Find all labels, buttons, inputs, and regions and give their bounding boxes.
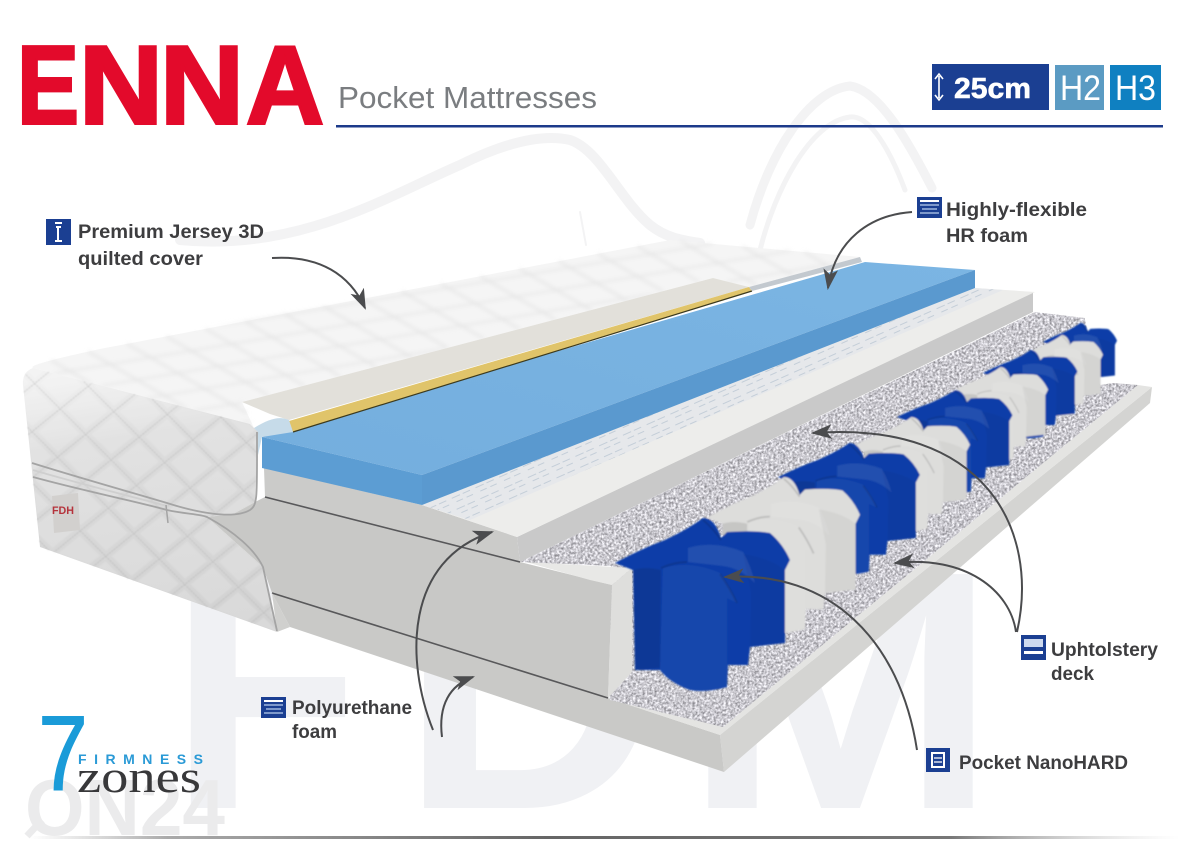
logo: 7 firmness zones: FIRMNESS xyxy=(78,751,203,767)
logo: 7 firmness zones: zones xyxy=(77,751,201,802)
logo: 7 firmness zones: 7 xyxy=(38,693,88,813)
blue HR foam layer xyxy=(262,262,975,505)
badge: height 25cm: 25cm xyxy=(954,73,1031,105)
badge: H2 firmness: H2 xyxy=(1060,69,1101,108)
title: ENNA: A xyxy=(246,24,324,148)
cover end panel xyxy=(23,368,290,632)
pocket group 2 white xyxy=(707,477,860,633)
FDH sewn label: FDH xyxy=(52,505,74,517)
icon: jersey cover xyxy=(46,219,71,245)
label: premium cover: quilted cover xyxy=(78,249,204,270)
fleece upholstery under pockets xyxy=(610,320,1138,727)
icon: HR foam xyxy=(917,197,942,218)
label: premium cover: Premium Jersey 3D xyxy=(78,222,264,243)
arrow: upholstery lower xyxy=(895,562,1016,632)
upper fleece deck xyxy=(520,312,1085,566)
zipper seams xyxy=(32,432,277,631)
cover top surface xyxy=(33,240,860,428)
badge: height 25cm xyxy=(932,64,1049,110)
watermark: swoosh lines xyxy=(180,86,932,250)
arrow: pocket xyxy=(725,577,917,750)
icon: polyurethane xyxy=(261,697,286,718)
watermark: ON24: ON24 xyxy=(25,763,225,852)
pocket group 5 blue xyxy=(897,390,1012,494)
label: premium cover xyxy=(78,222,264,270)
pocket group 3 blue xyxy=(778,443,920,574)
label: HR foam xyxy=(946,200,1087,247)
title: ENNA: N xyxy=(160,24,244,148)
arrow: polyurethane lower xyxy=(441,677,473,737)
footer rule xyxy=(30,836,1180,839)
pocket group 8 white xyxy=(1020,335,1103,416)
arrow: polyurethane top xyxy=(416,532,492,730)
label: polyurethane: foam xyxy=(292,722,337,743)
pocket springs row xyxy=(615,323,1117,691)
label: upholstery: Uphtolstery xyxy=(1051,640,1158,661)
pocket group 9 blue xyxy=(1043,323,1117,396)
label: HR foam: HR foam xyxy=(946,226,1028,247)
watermark: FDM letters xyxy=(170,483,998,859)
FDH sewn label xyxy=(52,493,80,533)
icon: pocket spring xyxy=(926,748,950,772)
header rule xyxy=(336,125,1163,128)
base foam slab xyxy=(272,385,1152,772)
pocket group 7 blue xyxy=(983,350,1078,438)
arrow: upholstery upper xyxy=(813,432,1022,632)
logo: 7 firmness zones xyxy=(38,693,203,813)
wool and gold inner layers xyxy=(242,257,862,455)
subtitle: Pocket Mattresses: Pocket Mattresses xyxy=(338,80,597,115)
label: HR foam: Highly-flexible xyxy=(946,200,1087,221)
title: ENNA: E xyxy=(17,24,79,148)
label: pocket: Pocket NanoHARD xyxy=(959,753,1128,774)
icon: upholstery xyxy=(1021,635,1046,660)
pocket group 1 blue xyxy=(615,518,790,691)
arrow: HR foam xyxy=(828,212,912,288)
label: polyurethane xyxy=(292,698,412,743)
pocket group 4 white xyxy=(852,417,970,531)
pocket group 6 white xyxy=(952,367,1048,460)
mattress cross-section xyxy=(23,240,1152,772)
label: polyurethane: Polyurethane xyxy=(292,698,412,719)
badge: H3 firmness: H3 xyxy=(1115,69,1156,108)
label: upholstery: deck xyxy=(1051,664,1094,685)
label: upholstery xyxy=(1051,640,1158,685)
top foam layer xyxy=(264,288,1035,562)
title: ENNA: N xyxy=(79,24,163,148)
arrow: cover xyxy=(272,258,365,308)
main polyurethane foam block xyxy=(207,497,632,698)
title: ENNA xyxy=(17,24,324,148)
